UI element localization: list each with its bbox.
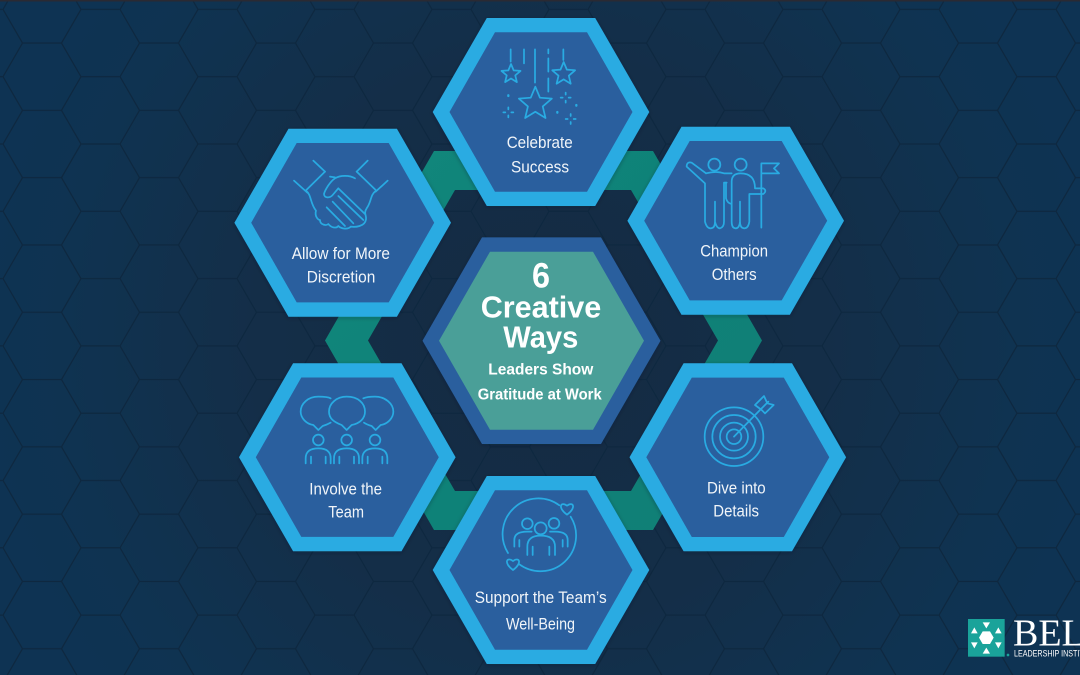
hexagon frame (433, 476, 649, 664)
icon: people with speech bubbles (301, 397, 393, 463)
label (700, 242, 768, 284)
label: Champion (700, 242, 768, 261)
label: Success (511, 157, 569, 176)
label (507, 133, 573, 176)
label: Others (712, 265, 757, 284)
label: Dive into (707, 479, 766, 498)
subtitle (478, 362, 602, 404)
title: 6 (532, 257, 550, 296)
panel: involve the team (239, 363, 456, 551)
panel: champion others (627, 127, 844, 315)
hexagon frame (234, 129, 451, 317)
label: Discretion (307, 267, 375, 286)
subtitle: Leaders Show (488, 362, 594, 379)
subtitle: Gratitude at Work (478, 387, 602, 404)
hexagon frame (627, 127, 844, 315)
label (309, 479, 382, 521)
label (292, 244, 390, 286)
label: Support the Team’s (475, 588, 607, 607)
icon: two people with flag (687, 159, 779, 228)
panel: allow for more discretion (234, 129, 451, 317)
panel: center title (422, 237, 660, 444)
icon: stars (501, 49, 576, 124)
label: Team (328, 502, 364, 521)
logo mark (968, 619, 1009, 657)
panel: dive into details (630, 363, 846, 551)
label: Details (713, 501, 759, 520)
hexagon frame (433, 18, 649, 206)
label: Allow for More (292, 244, 390, 263)
hexagon frame (630, 363, 846, 551)
title: Creative (481, 290, 601, 325)
logo (968, 613, 1080, 659)
label: Celebrate (507, 133, 573, 152)
icon: handshake (294, 161, 388, 229)
label: Involve the (309, 479, 382, 498)
icon: target with arrow (705, 396, 774, 466)
label: Well-Being (506, 614, 575, 633)
connector ring (325, 151, 762, 530)
title (481, 257, 601, 354)
icon: team with hearts (503, 498, 576, 571)
panel: support the team's well-being (433, 476, 649, 664)
label (707, 479, 766, 520)
center hexagon (422, 237, 660, 444)
panel: celebrate success (433, 18, 649, 206)
label (475, 588, 607, 633)
title: Ways (503, 319, 578, 354)
hexagon frame (239, 363, 456, 551)
